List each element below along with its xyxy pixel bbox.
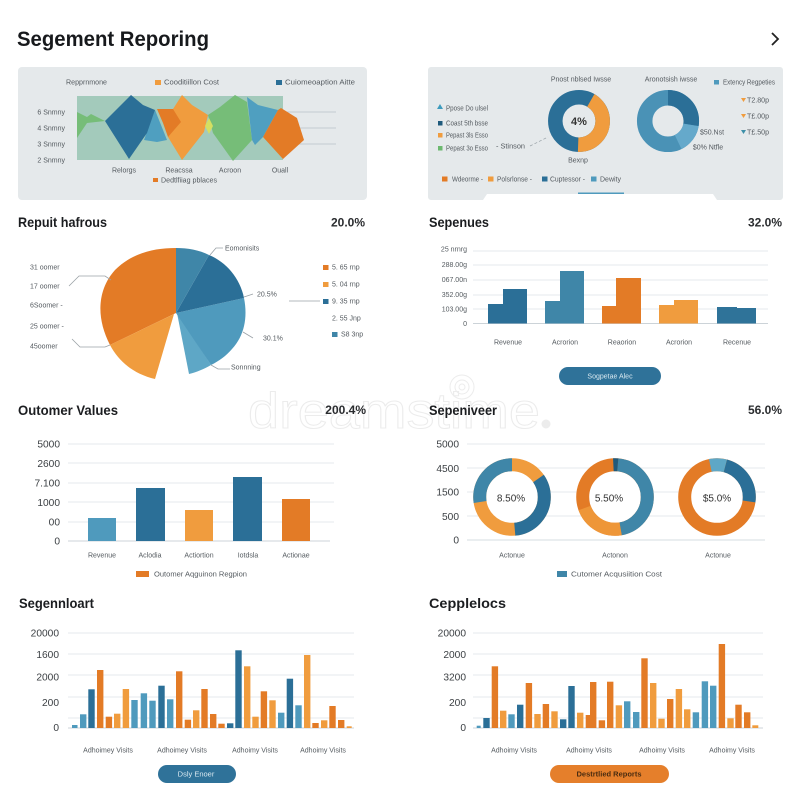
axis and grid: 1000 (37, 498, 60, 509)
bottom legend: Polsrlonse - (497, 176, 533, 184)
right labels: 20.5% (257, 292, 277, 298)
y axis labels: 4 Snmny (37, 126, 65, 132)
legend: 2. 55 Jnp (332, 316, 361, 322)
axis and grid (34, 440, 334, 548)
left labels: 17 oomer (30, 284, 60, 290)
left labels: 45oomer (30, 344, 58, 350)
axis and grid: 00 (49, 518, 60, 528)
axis and grid: 200 (42, 698, 59, 709)
left labels: 25 oomer - (30, 324, 65, 330)
axis and grid: 2000 (36, 672, 59, 684)
right legend: Extency Regpeties (723, 80, 775, 86)
legend: Cutomer Acqusiition Cost (571, 572, 662, 578)
panel legend: top: Repprnmone (66, 80, 107, 86)
bars (72, 650, 352, 728)
panel: area chart (18, 67, 367, 200)
legend: S8 3np (341, 332, 363, 338)
x labels (88, 552, 310, 560)
x labels: Iotdsla (238, 552, 258, 560)
button (158, 765, 236, 783)
x labels (491, 748, 755, 754)
axis and grid: 5000 (37, 440, 60, 450)
panel legend: top: Cooditiillon Cost (164, 80, 219, 86)
title: Segement Reporing (17, 28, 209, 51)
donut two labels (693, 130, 724, 152)
x labels: Revenue (494, 340, 522, 346)
panel: donuts (428, 67, 783, 200)
button (559, 367, 661, 385)
y axis labels: 6 Snmny (37, 110, 65, 116)
axis and grid (438, 628, 763, 734)
right legend: T£.00p (747, 114, 769, 120)
button: Sogpetae Alec (587, 374, 633, 380)
left legend list: Pepast 3ls Esso (446, 132, 488, 140)
donut one value: 4% (571, 116, 587, 128)
heading: Sepeniveer (429, 402, 497, 418)
left labels (30, 264, 111, 350)
x labels: Adhoimy Visits (639, 748, 685, 754)
x labels: Actonue (499, 552, 525, 560)
x labels: Adhoimy Visits (232, 748, 278, 754)
axis and grid: 20000 (31, 628, 59, 640)
donut B (583, 465, 647, 529)
bottom legend (442, 176, 621, 184)
watermark: dreamstime (248, 383, 540, 439)
right labels: 30.1% (263, 336, 283, 342)
axis and grid: 25 nrnrg (441, 246, 467, 254)
axis and grid (436, 440, 765, 546)
axis and grid: 1500 (436, 488, 459, 498)
x labels: Reaorion (608, 340, 636, 346)
x labels: Adhoimy Visits (566, 748, 612, 754)
bars (488, 271, 756, 324)
x labels: Recenue (723, 340, 751, 346)
right legend: T2.80p (747, 98, 769, 104)
layered area chart (77, 95, 336, 161)
panel: segment bars (19, 595, 354, 783)
x labels: Acrorion (552, 340, 578, 346)
x axis labels: Reacssa (165, 168, 193, 174)
axis and grid: 2000 (443, 650, 466, 661)
x labels: Adhoimy Visits (491, 748, 537, 754)
left labels: 31 oomer (30, 264, 60, 272)
panel legend: top (66, 80, 355, 86)
axis and grid: 0 (463, 321, 467, 328)
axis and grid: 288.00g (442, 262, 467, 269)
bars (88, 477, 310, 541)
x labels (83, 748, 346, 754)
callout (496, 137, 548, 150)
x labels: Actonon (602, 552, 628, 560)
donut one (555, 97, 603, 145)
value: 200.4% (325, 403, 366, 417)
donut C (685, 465, 749, 529)
button: Destrtlied Reports (576, 770, 642, 778)
panel legend: bottom: Dedtlfiiag pblaces (161, 178, 217, 184)
donut one caption: Bexnp (568, 158, 588, 164)
x axis labels: Acroon (219, 168, 241, 174)
x labels: Actonue (705, 552, 731, 560)
panel: revenue bars (429, 214, 782, 385)
panel: customer values (18, 402, 366, 578)
x labels (499, 552, 731, 560)
axis and grid (441, 246, 768, 328)
x labels: Acrorion (666, 340, 692, 346)
legend: Outomer Aqguinon Regpion (154, 572, 247, 578)
right legend (714, 80, 775, 136)
donut two labels: $50.Nst (700, 130, 724, 136)
icon: chevron (772, 33, 778, 45)
right labels: Eomonisits (225, 246, 260, 252)
bars (477, 644, 758, 728)
right labels (210, 246, 320, 372)
value: 20.0% (331, 216, 365, 230)
x labels: Adhoimy Visits (709, 748, 755, 754)
heading: Sepenues (429, 214, 489, 230)
axis and grid: 5000 (436, 440, 459, 450)
left labels: 6Soomer - (30, 302, 63, 310)
x labels: Actionae (282, 552, 310, 560)
axis and grid: 20000 (438, 628, 466, 640)
donut A value: 8.50% (497, 494, 525, 504)
callout: - Stinson (496, 144, 525, 150)
axis and grid: 2600 (37, 459, 60, 470)
panel: cepple bars (429, 595, 763, 783)
left legend list: Coast 5th bsse (446, 120, 488, 128)
heading: Outomer Values (18, 402, 118, 418)
right labels: Sonnning (231, 364, 261, 372)
chart heading: donut one: Pnost nblsed Iwsse (551, 76, 611, 84)
legend: 5. 04 rnp (332, 282, 360, 288)
value: 32.0% (748, 216, 782, 230)
axis and grid: 200 (449, 698, 466, 709)
x labels (494, 340, 751, 346)
x axis labels: Ouall (272, 168, 289, 174)
chart heading: donut two: Aronotsish iwsse (645, 76, 697, 84)
legend: 5. 65 rnp (332, 264, 360, 272)
legend (557, 571, 662, 578)
axis and grid: 0 (453, 536, 459, 546)
axis and grid: 0 (53, 723, 59, 734)
panel: donut trio (429, 402, 782, 578)
x labels: Aclodia (139, 552, 162, 560)
donut two labels: $0% Ntfle (693, 144, 723, 152)
x labels: Adhoimy Visits (300, 748, 346, 754)
bottom legend: Dewity (600, 176, 621, 184)
legend (323, 264, 363, 338)
y axis labels: 2 Snmny (37, 158, 65, 164)
legend: 9. 35 rnp (332, 298, 360, 306)
axis and grid: 500 (442, 512, 459, 523)
x labels: Revenue (88, 552, 116, 560)
right legend: T£.50p (747, 130, 769, 136)
button (550, 765, 669, 783)
axis and grid: 067.00n (442, 277, 467, 284)
axis and grid (31, 628, 354, 734)
heading: Cepplelocs (429, 595, 506, 611)
y axis labels: 3 Snmny (37, 142, 65, 148)
x labels: Adhoimey Visits (83, 748, 133, 754)
pie (100, 248, 246, 379)
bottom legend: Cuptessor - (550, 176, 586, 184)
x labels: Adhoimey Visits (157, 748, 207, 754)
donut A (480, 465, 544, 529)
left legend list (437, 104, 488, 152)
bottom legend: Wdeorme - (452, 176, 484, 184)
heading: Repuit hafrous (18, 214, 107, 230)
x axis labels (112, 168, 289, 174)
axis and grid: 352.00g (442, 292, 467, 299)
donut two (645, 98, 691, 144)
panel: pie chart (18, 214, 365, 379)
value: 56.0% (748, 403, 782, 417)
x labels: Actiortion (184, 552, 214, 560)
heading: Segennloart (19, 595, 94, 611)
axis and grid: 0 (54, 536, 60, 548)
panel legend: top: Cuiomeoaption Aitte (285, 80, 355, 86)
donut B value: 5.50% (595, 494, 623, 504)
button: Dsly Enoer (178, 770, 215, 778)
left legend list: Ppose Do ulsel (446, 106, 488, 112)
axis and grid: 103.00g (442, 306, 467, 314)
x axis labels: Relorgs (112, 168, 137, 174)
donut C value: $5.0% (703, 494, 731, 504)
axis and grid: 3200 (443, 672, 466, 684)
axis and grid: 7.100 (34, 478, 60, 490)
y axis labels (37, 110, 65, 164)
left legend list: Pepast 3o Esso (446, 146, 488, 152)
axis and grid: 4500 (436, 464, 459, 475)
axis and grid: 0 (460, 723, 466, 734)
axis and grid: 1600 (36, 650, 59, 661)
